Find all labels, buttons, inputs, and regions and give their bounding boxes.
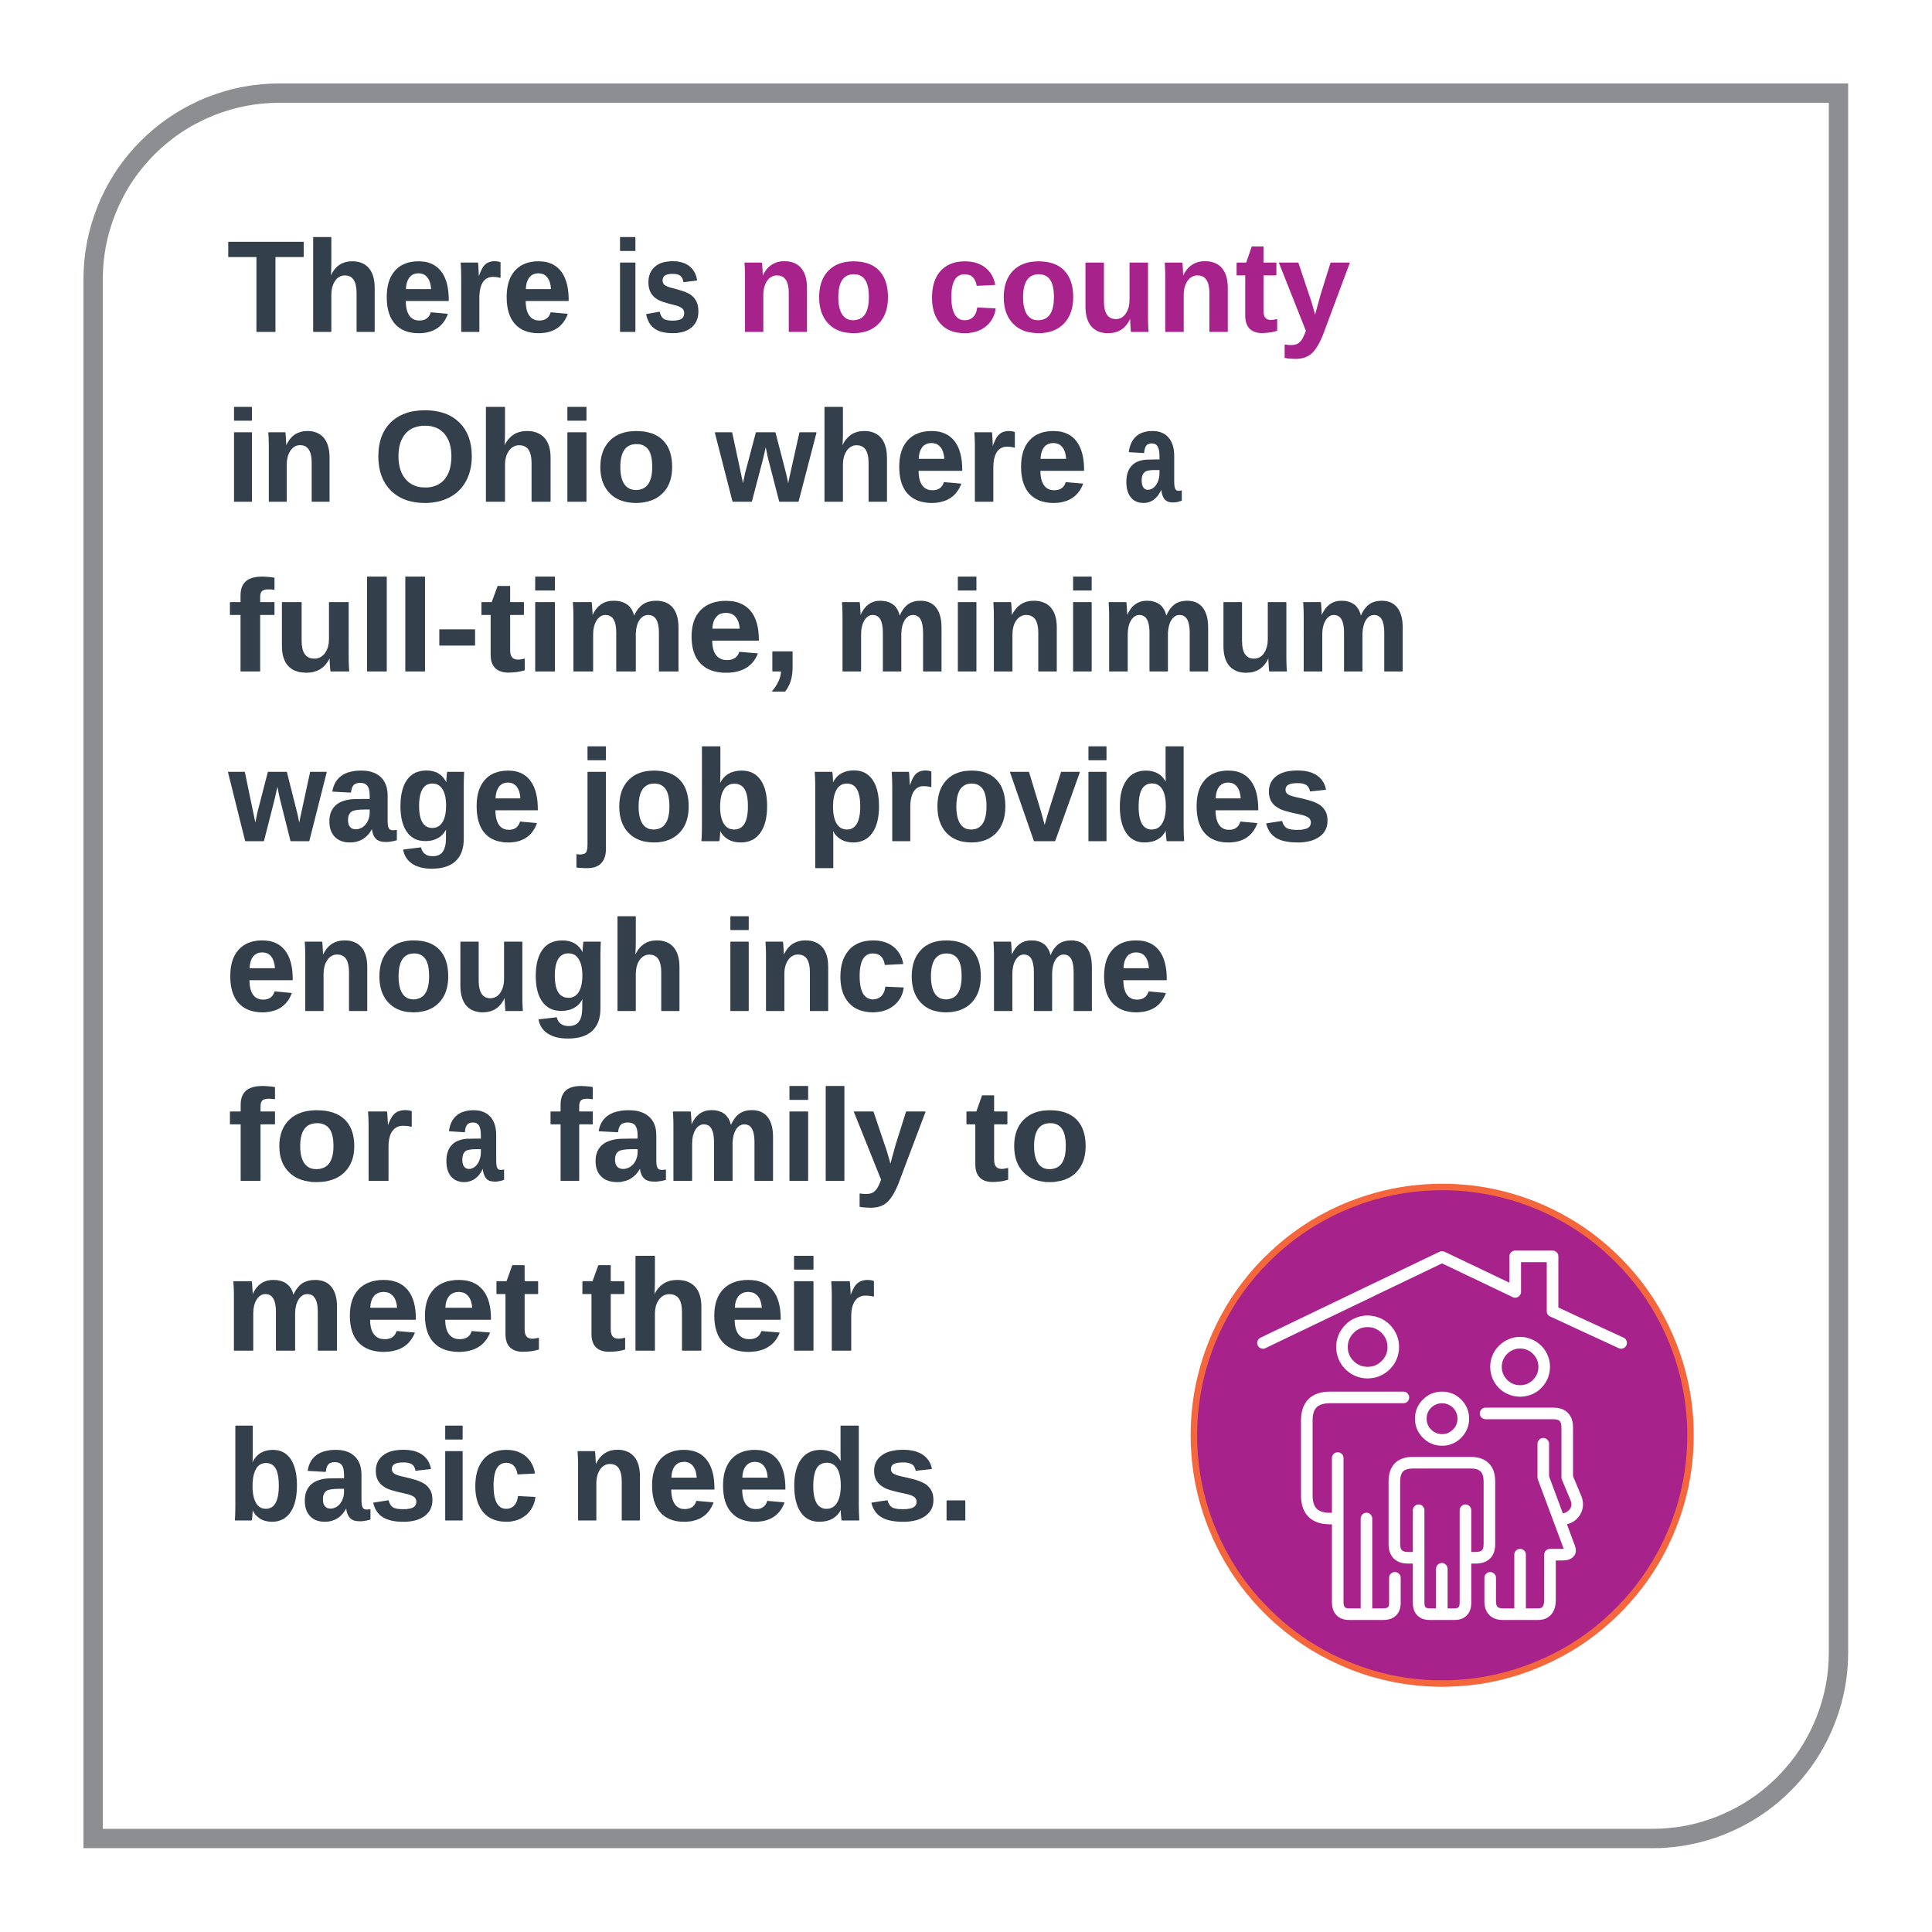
- icon line art: [1263, 1257, 1621, 1614]
- adult head right: [1496, 1343, 1544, 1391]
- text block: main statement: [225, 214, 1410, 1548]
- right adult body: [1485, 1413, 1577, 1614]
- line 1: county: [927, 214, 1350, 359]
- line 7: meet: [225, 1233, 540, 1378]
- line 5: income: [722, 893, 1171, 1039]
- line 1: [227, 214, 1350, 359]
- child head: [1420, 1397, 1464, 1440]
- icon background circle: [1194, 1187, 1691, 1683]
- line 5: [226, 893, 1171, 1039]
- line 3: [228, 553, 1410, 699]
- adult head left: [1342, 1321, 1393, 1372]
- line 2: where: [715, 384, 1088, 529]
- line 3: full-time,: [228, 553, 801, 699]
- line 2: [226, 384, 1182, 529]
- line 7: [225, 1233, 876, 1378]
- line 4: wage: [228, 723, 542, 869]
- line 3: minimum: [834, 553, 1410, 699]
- line 4: job: [577, 723, 772, 869]
- roof with chimney: [1263, 1257, 1621, 1343]
- line 8: [227, 1403, 974, 1548]
- child body: [1394, 1463, 1489, 1614]
- line 1: no: [736, 214, 893, 359]
- line 5: enough: [226, 893, 687, 1039]
- line 6: [228, 1063, 1090, 1209]
- icon: family under a roof in a purple circle: [1194, 1187, 1691, 1683]
- line 6: to: [965, 1063, 1090, 1209]
- line 8: needs.: [570, 1403, 974, 1548]
- line 4: provides: [807, 723, 1332, 869]
- line 2: in: [226, 384, 337, 529]
- line 7: their: [581, 1233, 876, 1378]
- line 2: a: [1124, 384, 1182, 529]
- line 1: is: [613, 214, 702, 359]
- line 6: family: [549, 1063, 926, 1209]
- line 6: a: [444, 1063, 504, 1209]
- line 2: Ohio: [373, 384, 677, 529]
- left adult body: [1307, 1397, 1403, 1614]
- line 4: [228, 723, 1332, 869]
- line 1: There: [227, 214, 573, 359]
- line 6: for: [228, 1063, 413, 1209]
- line 8: basic: [227, 1403, 539, 1548]
